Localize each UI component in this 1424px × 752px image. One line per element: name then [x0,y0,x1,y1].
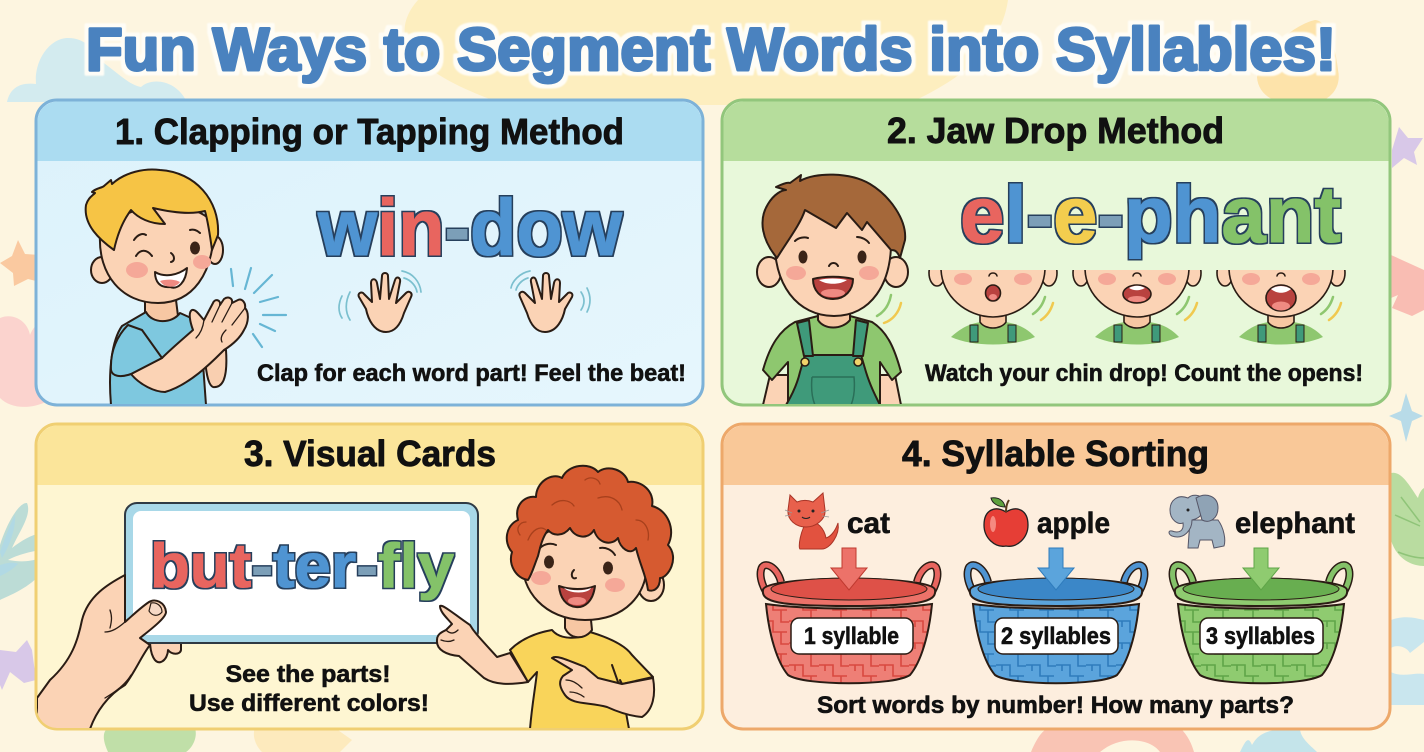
illustration: small mouth open [929,260,1057,344]
caption: method 3 second line: Use different colors! [189,690,429,717]
basket: red 1 syllable [761,548,937,683]
illustration: boy pointing at card [437,466,673,729]
caption: method 1: Clap for each word part! Feel the beat! [257,360,686,387]
icon: cat [785,493,838,549]
panel: syllable sorting [722,424,1390,729]
panel header: method 1 [37,102,702,161]
label: 1 syllable [791,618,913,654]
icon: right clapping hand [511,271,590,332]
illustration: medium mouth open [1073,260,1201,344]
label: 2 syllables [995,618,1118,654]
illustration: hand holding card [37,575,166,729]
illustration: boy clapping [86,170,248,405]
panel: jaw drop method [722,100,1390,405]
word: elephant: elephant [1235,507,1355,540]
flash card [125,503,478,643]
heading: method 3: 3. Visual Cards [244,433,496,474]
heading: method 4: 4. Syllable Sorting [902,433,1209,474]
panel header: method 4 [723,426,1389,485]
panel: visual cards [36,424,703,729]
word: but-ter-fly: but-ter-fly [150,532,455,601]
caption: method 4: Sort words by number! How many parts? [817,692,1294,719]
word: apple: apple [1037,507,1110,540]
panel header: method 2 [723,102,1389,161]
caption: method 3: See the parts! [226,661,390,688]
label: 3 syllables [1200,618,1323,654]
basket: blue 2 syllables [968,548,1144,683]
title: Fun Ways to Segment Words into Syllables! [86,16,1336,83]
word: el-e-phant: el-e-phant [960,170,1341,259]
word: cat: cat [847,507,890,540]
icon: clap rays [231,268,286,347]
heading: method 2: 2. Jaw Drop Method [887,110,1224,151]
icon: apple [984,498,1028,546]
label: 1 syllable: 1 syllable [804,623,899,650]
caption: method 2: Watch your chin drop! Count the opens! [925,360,1363,387]
icon: left clapping hand [339,271,421,332]
illustration: boy with overalls [757,175,908,405]
label: 3 syllables: 3 syllables [1206,623,1315,650]
panel header: method 3 [37,426,702,485]
illustration: wide mouth open [1217,260,1345,344]
label: 2 syllables: 2 syllables [1001,623,1111,650]
heading: method 1: 1. Clapping or Tapping Method [115,111,624,152]
icon: elephant [1169,495,1225,548]
illustration: fingers behind card [150,640,181,662]
basket: green 3 syllables [1173,548,1349,683]
word: win-dow: win-dow [317,183,623,272]
panel: clapping or tapping method [36,100,703,405]
